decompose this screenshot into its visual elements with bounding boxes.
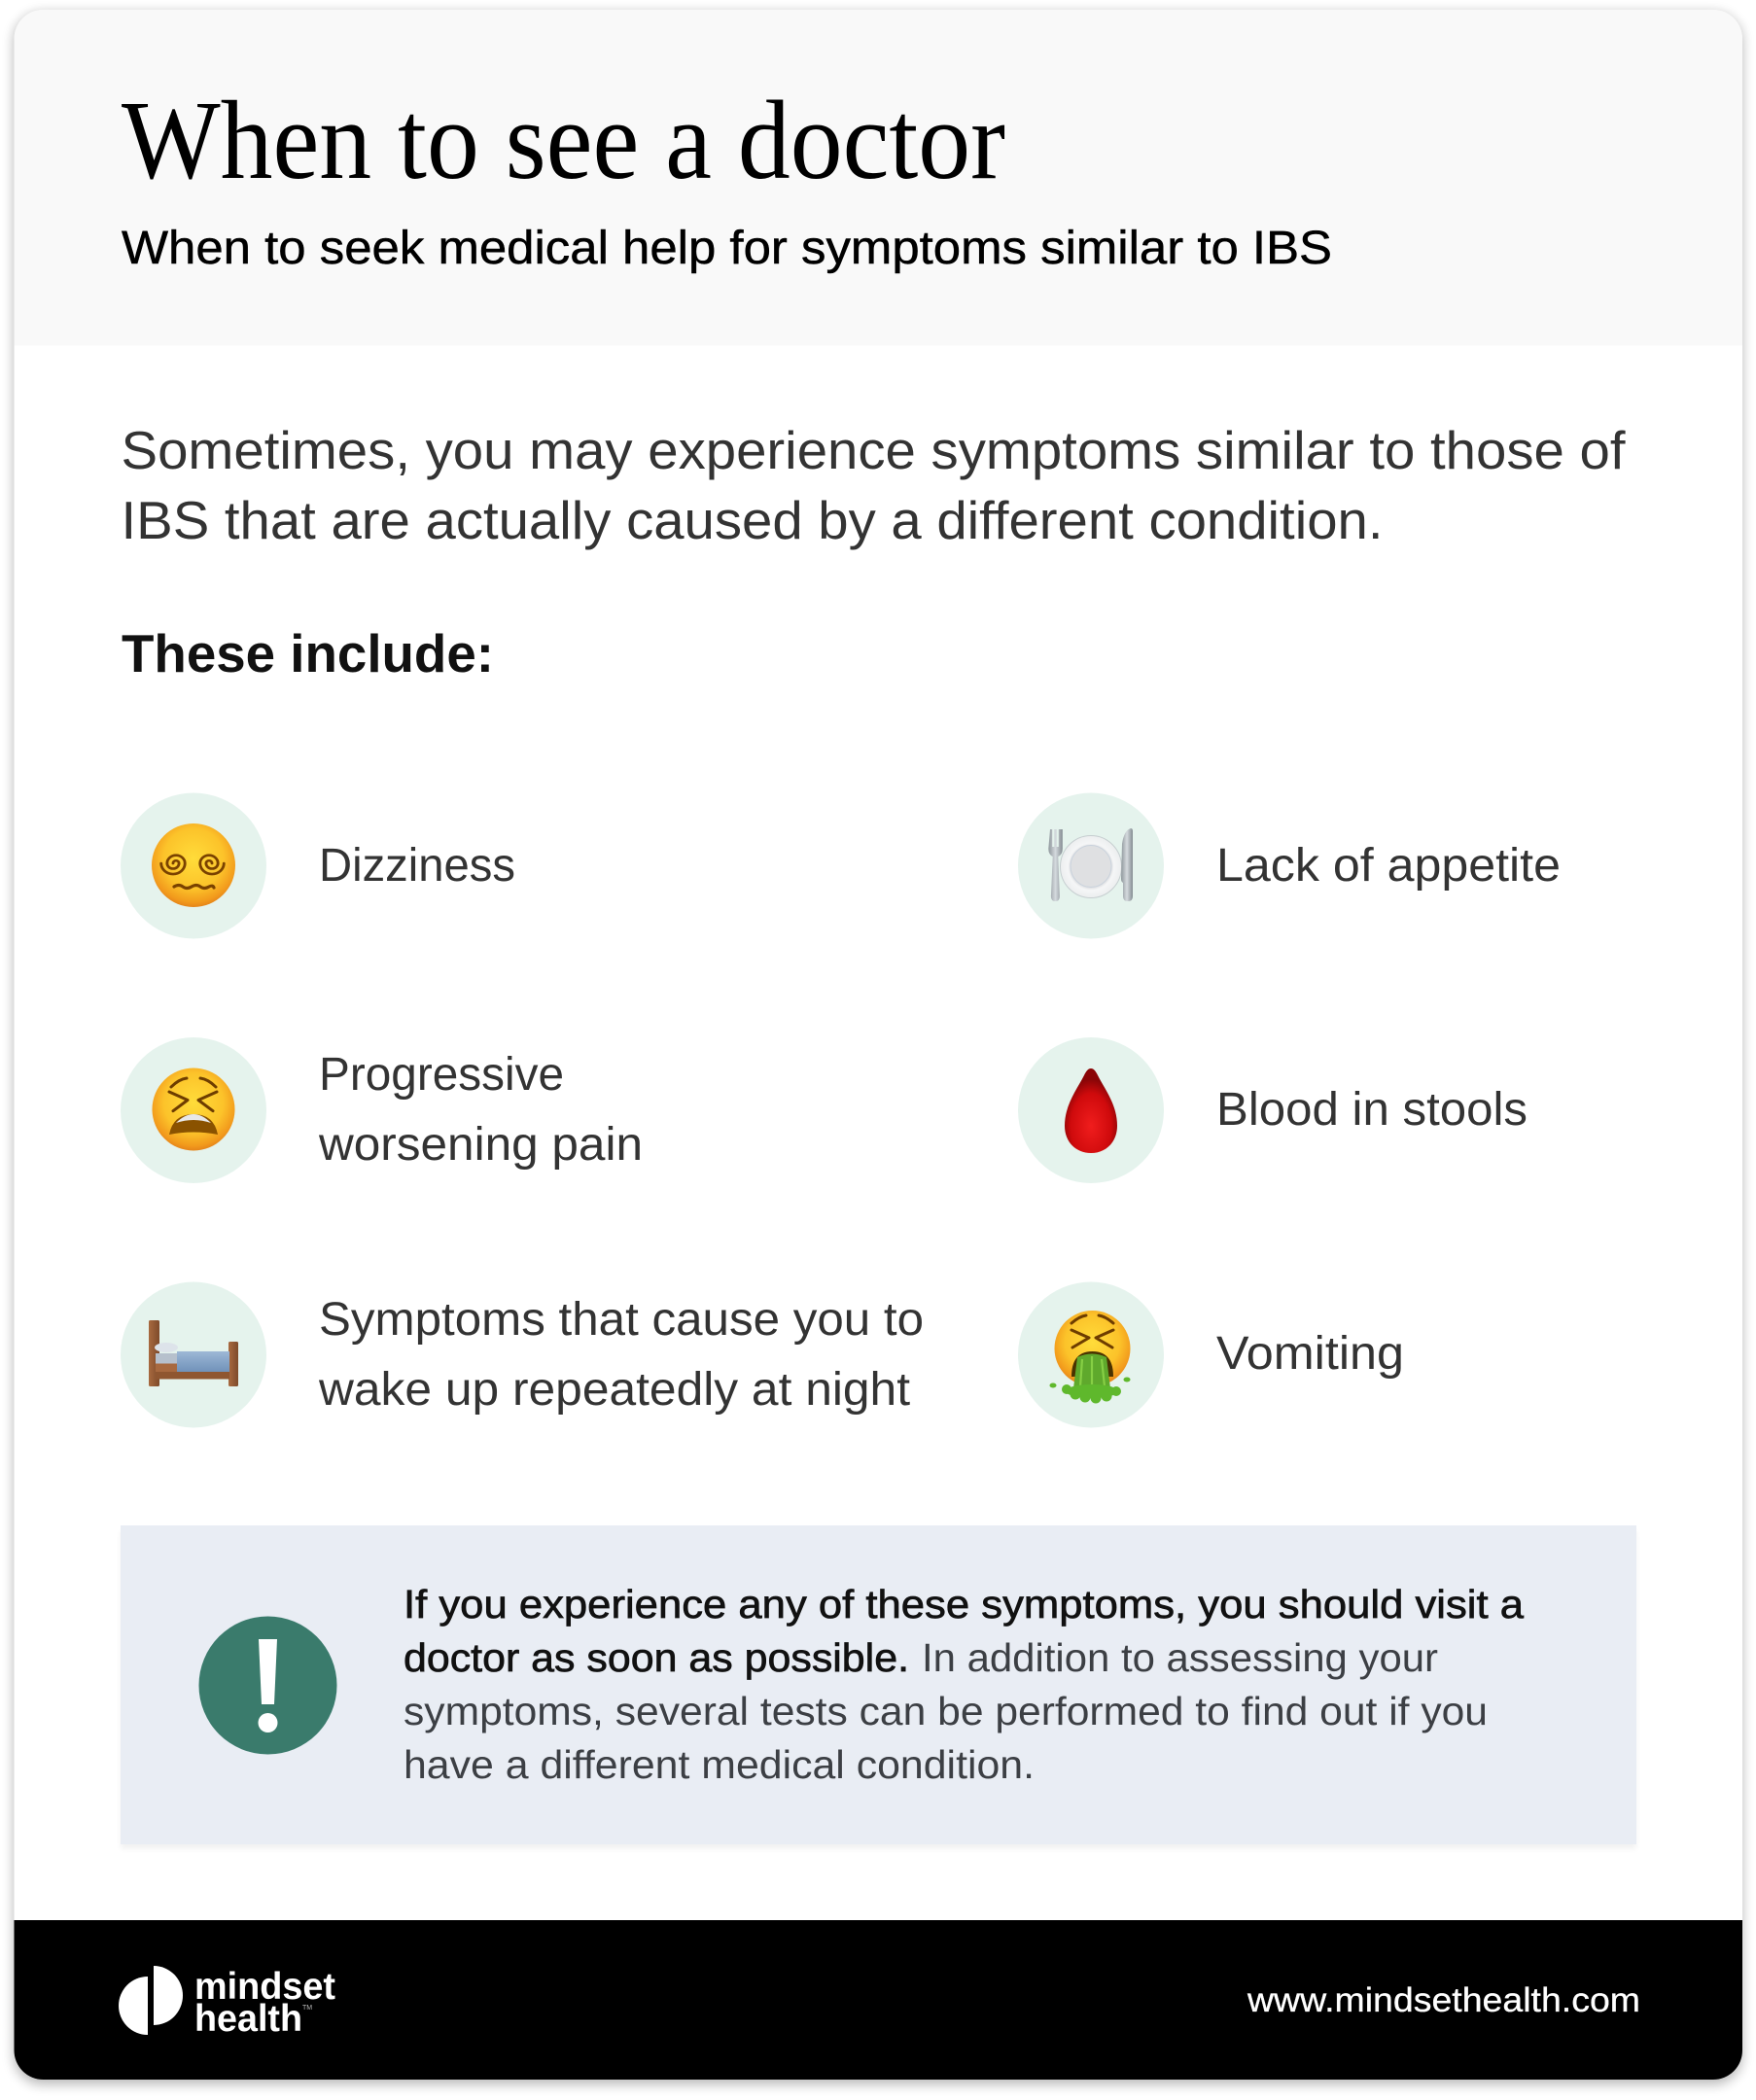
- label: worsening pain: [318, 1119, 643, 1171]
- intro text: Sometimes, you may experience symptoms similar to those of: [121, 420, 1626, 480]
- item: dizziness: [121, 793, 515, 939]
- logo wordmark: TM: [302, 2005, 312, 2012]
- label: Lack of appetite: [1216, 840, 1561, 892]
- callout text: symptoms, several tests can be performed to find out if you: [404, 1689, 1488, 1733]
- icon: persevering face: [152, 1068, 235, 1151]
- icon: vomiting face: [1050, 1311, 1130, 1404]
- logo mark: [119, 1966, 183, 2035]
- subtitle: When to seek medical help for symptoms similar to IBS: [122, 223, 1332, 274]
- logo wordmark: mindset: [194, 1966, 335, 2008]
- callout text: have a different medical condition.: [404, 1742, 1035, 1787]
- panel: footer: [14, 1920, 1742, 2080]
- icon: blood drop: [1065, 1068, 1117, 1153]
- item: waking at night: [121, 1281, 924, 1427]
- label: Dizziness: [319, 840, 515, 892]
- label: Progressive: [319, 1049, 564, 1101]
- item: progressive pain: [121, 1037, 643, 1183]
- label: Symptoms that cause you to: [319, 1294, 924, 1346]
- label: [318, 1294, 924, 1416]
- callout shadow: [121, 1531, 1636, 1849]
- intro text: IBS that are actually caused by a different condition.: [121, 490, 1383, 550]
- section heading: These include:: [122, 623, 494, 683]
- title: When to see a doctor: [122, 79, 1005, 203]
- label: Blood in stools: [1216, 1084, 1528, 1136]
- callout text: In addition to assessing your: [922, 1635, 1438, 1680]
- label: [318, 1049, 643, 1171]
- label: wake up repeatedly at night: [318, 1364, 910, 1416]
- icon: bed: [149, 1320, 238, 1386]
- label: Vomiting: [1216, 1328, 1404, 1380]
- website: www.mindsethealth.com: [1247, 1981, 1640, 2019]
- icon: exclamation mark: [198, 1616, 336, 1754]
- callout text: doctor as soon as possible.: [404, 1635, 909, 1680]
- panel: header: [14, 10, 1742, 346]
- item: vomiting: [1018, 1281, 1404, 1427]
- logo wordmark: [194, 1966, 335, 2040]
- panel: callout: [121, 1525, 1636, 1844]
- intro text: [121, 420, 1626, 550]
- callout text: If you experience any of these symptoms, you should visit a: [404, 1582, 1524, 1627]
- item: blood in stools: [1018, 1037, 1528, 1183]
- icon: plate and cutlery: [1048, 828, 1133, 901]
- callout text: [404, 1582, 1524, 1787]
- item: lack of appetite: [1018, 793, 1561, 939]
- logo wordmark: health: [194, 1998, 302, 2040]
- icon: dizzy face: [152, 823, 235, 907]
